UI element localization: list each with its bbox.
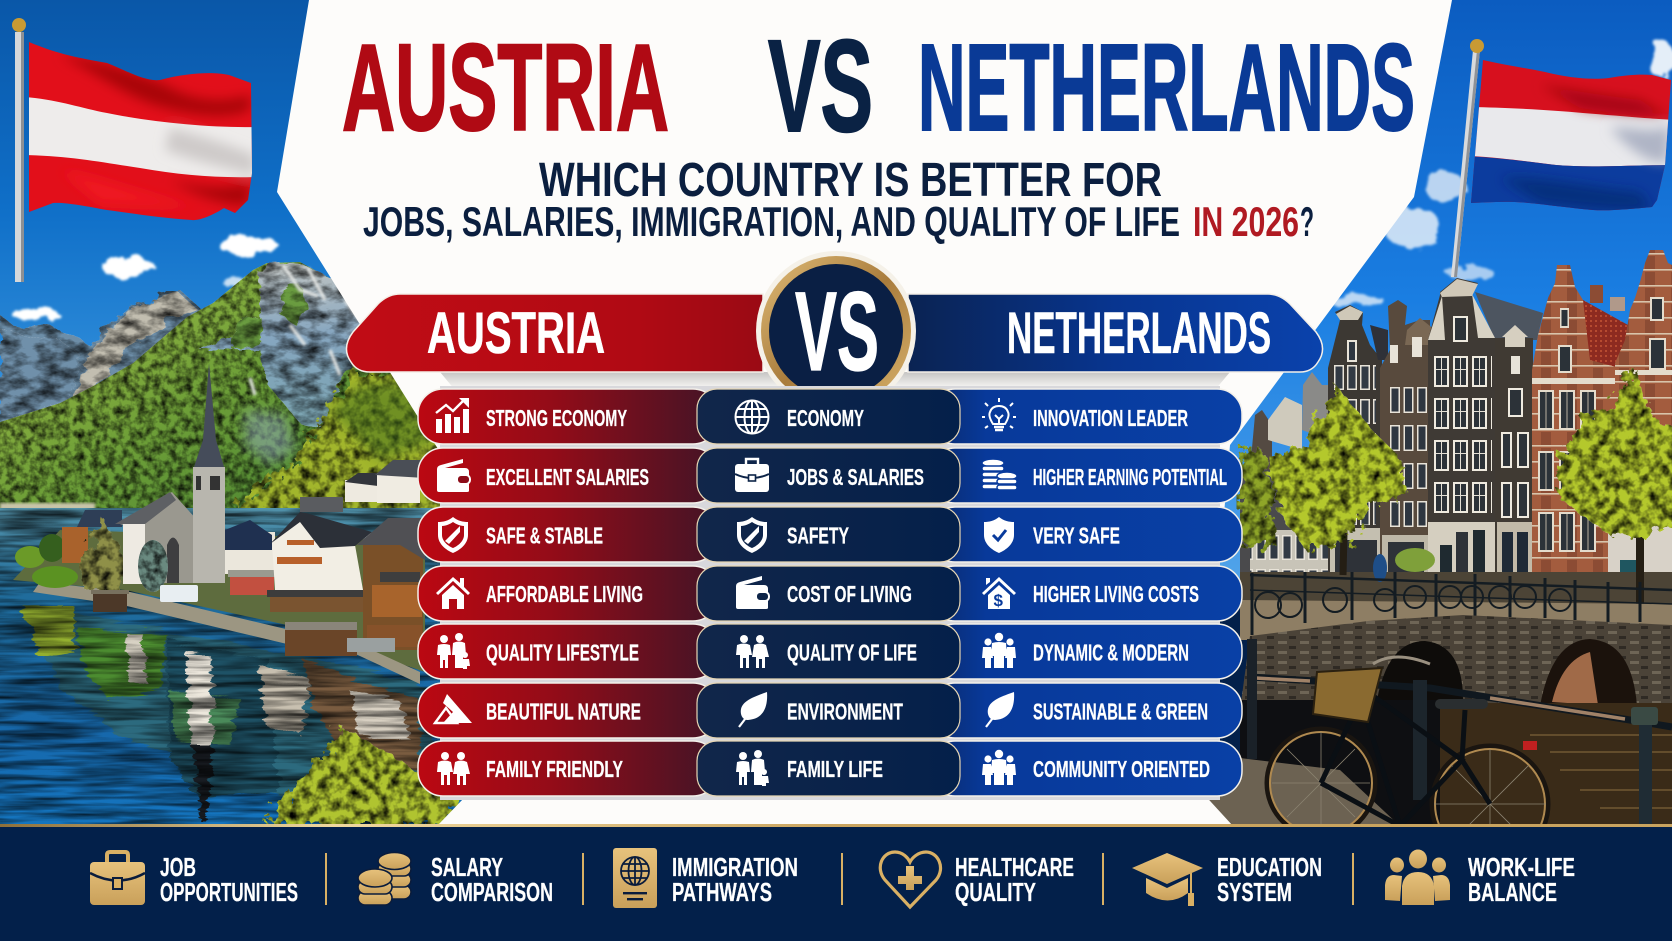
photo: Amsterdam canal houses [1200,0,1672,862]
icon: wallet [736,576,769,609]
text: higher earning potential: HIGHER EARNING POTENTIAL [1033,464,1227,490]
subtitle line 2: JOBS, SALARIES, IMMIGRATION, AND QUALITY OF LIFE [363,198,1180,245]
icon: gold briefcase [90,852,145,905]
text: quality lifestyle: QUALITY LIFESTYLE [486,640,639,666]
stone bridge [1240,615,1672,710]
low far houses [1240,465,1340,575]
text: dynamic and modern: DYNAMIC & MODERN [1033,640,1189,666]
text: very safe: VERY SAFE [1033,522,1120,548]
icon: shield with check [984,517,1014,553]
green mountainside [0,262,425,512]
white header panel [277,0,1452,826]
icon: family [437,633,470,669]
bottom navy band [0,826,1672,941]
far shore [0,503,95,510]
railing foreground [1247,639,1672,825]
icon: group [982,750,1016,785]
icon: house [436,577,470,609]
street-level backdrop behind railing [1240,572,1672,604]
text: safe and stable: SAFE & STABLE [486,522,603,548]
header banner shadow [440,372,1230,390]
item: work-life balance: BALANCE [1468,877,1557,907]
icon: globe [736,400,768,434]
title [342,12,1415,159]
flag: Netherlands [1451,39,1672,277]
house C brick [1615,250,1672,575]
icon: light bulb [982,398,1016,430]
bicycle [1267,657,1548,862]
canal water [1440,703,1672,826]
icon: graduation cap [1132,853,1203,906]
text: excellent salaries: EXCELLENT SALARIES [486,464,649,490]
subtitle [363,154,1314,245]
row 2: jobs and salaries [418,448,1242,503]
title: Austria: AUSTRIA [342,20,669,157]
item: job opportunities [90,852,298,907]
text: affordable living: AFFORDABLE LIVING [486,581,643,607]
icon: family [736,750,769,786]
row 7: family [418,741,1242,796]
icon: leaf [739,692,767,727]
house E [1380,300,1430,575]
icon: wallet [437,459,470,492]
row 5: quality of life [418,624,1242,679]
title: VS: VS [768,12,873,159]
item: work-life balance [1385,850,1575,907]
icon: heart with cross [880,852,941,907]
gold divider line [0,824,1672,827]
item: job opportunities: OPPORTUNITIES [160,877,298,907]
item: salary comparison [358,852,553,907]
front forest hill [225,373,450,560]
icon: couple [736,635,769,668]
text: community oriented: COMMUNITY ORIENTED [1033,756,1210,782]
foreground foliage [267,727,460,826]
house B brick [1532,265,1628,575]
village shore [13,530,425,672]
subtitle year accent: IN 2026 [1193,198,1299,245]
icon: house with dollar: $ [994,591,1004,610]
icon: coins [982,459,1017,490]
item: salary comparison: COMPARISON [431,877,553,907]
label: salary comparison: SALARY [431,852,503,882]
icon: briefcase [735,459,769,492]
label: healthcare quality: HEALTHCARE [955,852,1074,882]
banner: Austria [346,294,763,372]
icon: couple [437,752,470,785]
label: work-life balance: WORK-LIFE [1468,852,1575,882]
text: environment: ENVIRONMENT [787,698,903,724]
row 1: economy [418,389,1242,444]
text: innovation leader: INNOVATION LEADER [1033,405,1188,431]
item: immigration pathways: PATHWAYS [672,877,772,907]
banner label Austria: AUSTRIA [427,301,605,366]
icon: leaf [986,692,1014,727]
icon: gold coins [358,852,411,905]
house A [1475,292,1543,340]
icon: rising chart [436,398,469,433]
item: immigration pathways [613,848,798,908]
text: cost of living: COST OF LIVING [787,581,912,607]
text: safety: SAFETY [787,522,849,548]
icon: gold people [1385,850,1450,905]
street [1240,600,1672,640]
question mark: ? [1300,198,1314,245]
item: healthcare quality [880,852,1074,907]
text: quality of life: QUALITY OF LIFE [787,640,917,666]
label: education system: EDUCATION [1217,852,1322,882]
text: jobs and salaries: JOBS & SALARIES [787,464,924,490]
item: education system [1132,852,1322,907]
icon: shield [737,517,767,553]
lake with reflections [0,508,462,824]
row 6: environment [418,683,1242,738]
text: sustainable and green: SUSTAINABLE & GREEN [1033,698,1208,724]
label: immigration pathways: IMMIGRATION [672,852,798,882]
label: job opportunities: JOB [160,852,196,882]
text: beautiful nature: BEAUTIFUL NATURE [486,698,641,724]
text: family life: FAMILY LIFE [787,756,883,782]
subtitle line 1: WHICH COUNTRY IS BETTER FOR [539,154,1162,207]
row 4: cost of living [418,566,1242,621]
text: higher living costs: HIGHER LIVING COSTS [1033,581,1199,607]
icon: passport [613,848,657,908]
banner: Netherlands [908,294,1323,372]
house D [1328,305,1382,575]
badge label VS: VS [795,269,879,394]
text: family friendly: FAMILY FRIENDLY [486,756,623,782]
row 3: safety [418,507,1242,562]
icon: house with dollar [982,577,1016,610]
icon: mountains [435,694,472,723]
flag: Austria [12,18,260,282]
canal railing with bicycles [1250,572,1672,635]
item: healthcare quality: QUALITY [955,877,1036,907]
icon: shield [438,517,468,553]
far mountains [0,290,240,470]
item: education system: SYSTEM [1217,877,1292,907]
text: economy: ECONOMY [787,405,864,431]
house F [1495,338,1533,575]
banner label Netherlands: NETHERLANDS [1007,301,1271,366]
rock face [200,262,367,427]
icon: group [982,633,1016,668]
text: strong economy: STRONG ECONOMY [486,405,627,431]
VS badge [756,251,916,411]
row backing strip [440,386,1220,800]
trees [1343,490,1345,575]
photo: Austrian alpine lake village [0,0,490,840]
